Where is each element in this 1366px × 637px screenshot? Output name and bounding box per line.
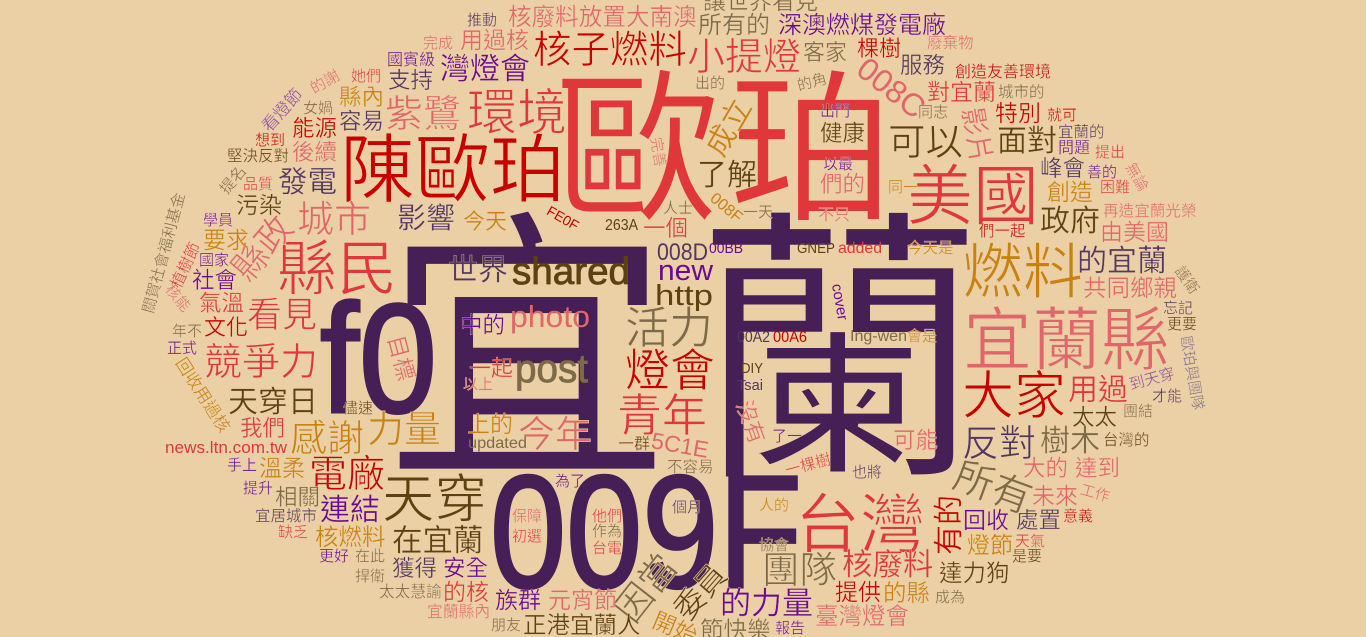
word: 無論: 無論 [1122,160,1151,194]
word: 她們: 她們 [351,68,381,85]
word: shared: shared [512,251,630,293]
word: 感謝: 感謝 [290,418,364,459]
word: 相關: 相關 [275,485,320,510]
word: 國賓級: 國賓級 [387,50,435,69]
word: 們的: 們的 [820,172,865,197]
word: 更好: 更好 [319,548,349,565]
word: 上的: 上的 [467,411,513,437]
word: 反對: 反對 [962,423,1036,464]
word: 目標: 目標 [382,332,420,384]
word: 不只: 不只 [818,207,850,224]
word: 團結: 團結 [1123,403,1153,420]
word: 在此: 在此 [355,548,385,565]
word: 廢棄物: 廢棄物 [927,33,974,52]
word: 國家: 國家 [199,252,229,269]
word: 可以: 可以 [888,121,963,163]
word: 台電: 台電 [592,540,622,557]
word: 今天: 今天 [463,209,507,234]
word: 所有的: 所有的 [698,12,770,39]
word: 歐珀: 歐珀 [555,59,903,243]
word: 008D: 008D [657,239,708,266]
word: 5C1E: 5C1E [649,427,711,463]
word: 學員: 學員 [203,211,233,229]
word: DIY: DIY [741,360,763,377]
word: 今天是: 今天是 [907,239,954,257]
word: 溫柔: 溫柔 [259,455,305,481]
word: 歐珀與團隊: 歐珀與團隊 [1177,335,1206,412]
word: 的謝: 的謝 [307,66,343,98]
word: 們一起: 們一起 [979,222,1026,240]
word: 面對: 面對 [997,125,1057,158]
word: 後續: 後續 [292,140,337,165]
word: 捍衛: 捍衛 [355,568,385,585]
word: 核廢料: 核廢料 [842,548,934,582]
word: 同一: 同一 [888,179,918,196]
word: 核廢料放置大南澳: 核廢料放置大南澳 [508,4,697,31]
word: 未來: 未來 [1032,483,1078,509]
word: 燈會: 燈會 [625,345,715,396]
word: 忘記: 忘記 [1163,300,1193,317]
word: 客家: 客家 [803,40,847,65]
word: added: added [838,240,882,257]
word: 今年: 今年 [518,414,592,455]
word: 提名: 提名 [216,162,250,198]
word: GNEP: GNEP [797,240,835,257]
word: 所有: 所有 [948,454,1038,522]
word: photo: photo [510,299,590,334]
word: 因當: 因當 [607,547,685,630]
word: 善的: 善的 [1087,164,1117,181]
word: 提出: 提出 [1095,144,1125,161]
word: 工作: 工作 [1078,481,1112,506]
word: 保障: 保障 [512,507,542,525]
word: 以最: 以最 [823,156,853,173]
word: 服務: 服務 [900,53,945,78]
word: 大家: 大家 [962,368,1066,426]
word: 用過核: 用過核 [460,27,529,53]
word: 到天穿: 到天穿 [1127,364,1177,394]
word: 推動: 推動 [467,12,497,29]
word: 也將: 也將 [852,464,882,481]
word: 009F: 009F [490,442,802,621]
word: 植樹節: 植樹節 [167,239,204,291]
word: 00A2: 00A2 [737,329,770,346]
word: 獲得: 獲得 [392,556,437,581]
word: 008F: 008F [707,190,746,227]
word: 太太: 太太 [1072,405,1117,430]
word: updated: updated [468,435,527,452]
word: 城市的: 城市的 [998,83,1045,101]
word: 創造: 創造 [1047,179,1093,205]
word: 陳歐珀: 陳歐珀 [340,128,565,212]
word: 容易: 容易 [339,109,384,134]
word: 缺乏: 缺乏 [278,524,308,541]
word: 出門: 出門 [820,103,850,120]
word: 燈節: 燈節 [967,532,1013,558]
word: 天穿日: 天穿日 [228,386,318,419]
word: 問題: 問題 [1058,140,1090,157]
word: 一棵樹: 一棵樹 [783,450,833,480]
word: 看燈節: 看燈節 [258,85,306,136]
word: Tsai: Tsai [737,377,763,394]
word: 回收: 回收 [963,507,1009,533]
word: 在宜蘭: 在宜蘭 [392,524,484,558]
word: 的力量: 的力量 [720,586,813,621]
word: 我們: 我們 [240,416,285,441]
word: 朋友: 朋友 [491,617,521,634]
word: 力量: 力量 [367,409,441,450]
word: 困難: 困難 [1100,179,1130,196]
word: 00BB: 00BB [709,240,743,257]
word: 提升: 提升 [243,480,273,497]
word: 棵樹: 棵樹 [857,36,901,61]
word: 了一: 了一 [772,428,802,445]
word: 的縣: 的縣 [883,580,930,606]
word: 提供: 提供 [835,579,881,605]
word: 的宜蘭: 的宜蘭 [1077,245,1167,278]
word: 發電: 發電 [278,166,337,199]
word: 一天: 一天 [743,204,773,221]
word: 團隊: 團隊 [762,549,837,591]
word: cover: cover [828,283,851,322]
word: 一群: 一群 [618,435,650,453]
word: 人士: 人士 [663,200,693,217]
word: 了解: 了解 [697,159,757,192]
word: 核子燃料: 核子燃料 [533,29,687,72]
word: 個月: 個月 [672,499,702,516]
word: 城市: 城市 [297,199,371,240]
word: f0: f0 [320,272,437,445]
word: 臺灣燈會: 臺灣燈會 [815,603,909,629]
word: 沒有: 沒有 [731,397,770,447]
word: 報告: 報告 [775,620,805,637]
word: 中的: 中的 [460,313,505,338]
word: 宜蘭縣: 宜蘭縣 [963,302,1170,379]
word: 008C: 008C [850,50,933,126]
word: 競爭力: 競爭力 [204,342,318,384]
word: 達到: 達到 [1075,456,1120,481]
word: 完善: 完善 [647,136,668,168]
word: 為了: 為了 [555,473,585,490]
word: 會是: 會是 [907,328,937,345]
word: 宜居城市: 宜居城市 [255,507,317,525]
word: 縣政: 縣政 [224,208,301,289]
word: 青年: 青年 [617,390,707,441]
word: 小提燈: 小提燈 [687,37,801,79]
word: 成為: 成為 [935,589,965,606]
word: 護衛: 護衛 [1171,263,1202,297]
word: 想到: 想到 [255,132,285,149]
word: 宜蘭縣內: 宜蘭縣內 [427,603,490,621]
word: 能源: 能源 [292,116,337,141]
word: 成立: 成立 [700,94,759,162]
word: 世界: 世界 [448,254,508,287]
word: 文化: 文化 [204,315,248,340]
word: 完成: 完成 [423,35,453,52]
word: 作為: 作為 [592,523,622,540]
word: 同志: 同志 [918,104,948,121]
word: 用過: 用過 [1068,374,1128,407]
word: 峰會: 峰會 [1040,156,1085,181]
word: 核燃料: 核燃料 [315,524,386,550]
word: 燃料: 燃料 [963,239,1083,306]
word: 族群: 族群 [495,587,541,613]
word: 再造宜蘭光榮: 再造宜蘭光榮 [1103,202,1197,220]
word: 大的: 大的 [1023,456,1068,481]
word: 污染: 污染 [236,192,282,218]
word: 安全: 安全 [443,556,488,581]
word: 宜蘭的: 宜蘭的 [1058,123,1105,141]
word: 對宜蘭: 對宜蘭 [927,79,996,105]
word: 台灣的: 台灣的 [1103,431,1150,449]
word: 才能: 才能 [1152,388,1182,405]
word: 是要: 是要 [1012,548,1042,565]
word: 核能: 核能 [161,281,194,315]
word: 健康: 健康 [820,121,865,146]
word: 電廠: 電廠 [309,454,385,496]
word: 氣溫: 氣溫 [199,291,244,316]
word: 初選: 初選 [512,528,542,545]
word: 連結: 連結 [320,494,380,527]
word: 可能: 可能 [893,428,938,453]
word: 協會: 協會 [759,537,789,554]
word: 女媧: 女媧 [303,99,333,117]
word: 00A6: 00A6 [773,329,807,346]
word: 的角: 的角 [795,70,829,95]
word: 創造友善環境: 創造友善環境 [955,62,1051,81]
word: 關賀社會福利基金: 關賀社會福利基金 [139,190,189,315]
word: 台灣: 台灣 [795,488,925,561]
word: 政府: 政府 [1040,205,1100,238]
word: 堅決反對: 堅決反對 [227,147,289,165]
word: 意義: 意義 [1063,507,1093,525]
word: 特別: 特別 [995,100,1041,126]
word: 一起: 一起 [469,356,513,381]
word: 樹木: 樹木 [1040,425,1100,458]
word: 縣內: 縣內 [339,85,384,110]
word: 深澳燃煤發電廠: 深澳燃煤發電廠 [778,12,946,39]
word: 263A: 263A [605,217,638,234]
word: 委員: 委員 [667,557,734,627]
word: 環境: 環境 [467,85,567,141]
word: 活力: 活力 [625,304,713,353]
word: 美國: 美國 [907,159,1039,233]
word: 元宵節: 元宵節 [548,587,617,613]
word: 共同鄉親: 共同鄉親 [1083,275,1177,301]
word: 紫鷺: 紫鷺 [385,94,461,136]
word: 宜蘭: 宜蘭 [382,193,1006,517]
word: 太太慧諭: 太太慧諭 [379,583,442,601]
word: post: post [515,347,588,391]
word: 社會: 社會 [192,268,237,293]
word: 以上: 以上 [463,376,493,393]
word: news.ltn.com.tw: news.ltn.com.tw [165,438,288,457]
word: 天穿: 天穿 [382,470,487,529]
word: 儘速: 儘速 [343,400,373,417]
word: 要求: 要求 [203,227,249,253]
word: Ing-wen: Ing-wen [850,328,907,345]
word: 不容易: 不容易 [667,458,714,476]
word: 品質: 品質 [243,175,273,193]
word: FE0F: FE0F [544,203,582,233]
word: 年不: 年不 [172,323,202,340]
word: 看見: 看見 [247,296,317,335]
word: 由美國: 由美國 [1100,219,1169,245]
word: 影響: 影響 [397,202,455,235]
word: 影片: 影片 [956,105,997,165]
word: 灣燈會: 灣燈會 [440,53,530,86]
word: 出的: 出的 [695,75,725,92]
word: 天氣: 天氣 [1015,533,1045,550]
word: 人的: 人的 [759,497,789,514]
word: 就可: 就可 [1047,107,1077,124]
word: 一個: 一個 [643,216,688,241]
word: 的核: 的核 [443,579,489,605]
word: new: new [658,255,714,287]
word: 支持: 支持 [388,68,433,93]
word: 達力狗: 達力狗 [939,560,1010,586]
word: http: http [655,280,713,312]
word: 他們: 他們 [592,508,622,525]
word: 處置: 處置 [1016,508,1061,533]
word: 縣民: 縣民 [277,236,397,303]
word: 正式: 正式 [167,340,197,357]
word: 手上: 手上 [227,457,257,474]
word: 更要: 更要 [1167,316,1197,333]
word: 回收用過核: 回收用過核 [171,354,234,436]
word: 有的: 有的 [933,495,966,555]
